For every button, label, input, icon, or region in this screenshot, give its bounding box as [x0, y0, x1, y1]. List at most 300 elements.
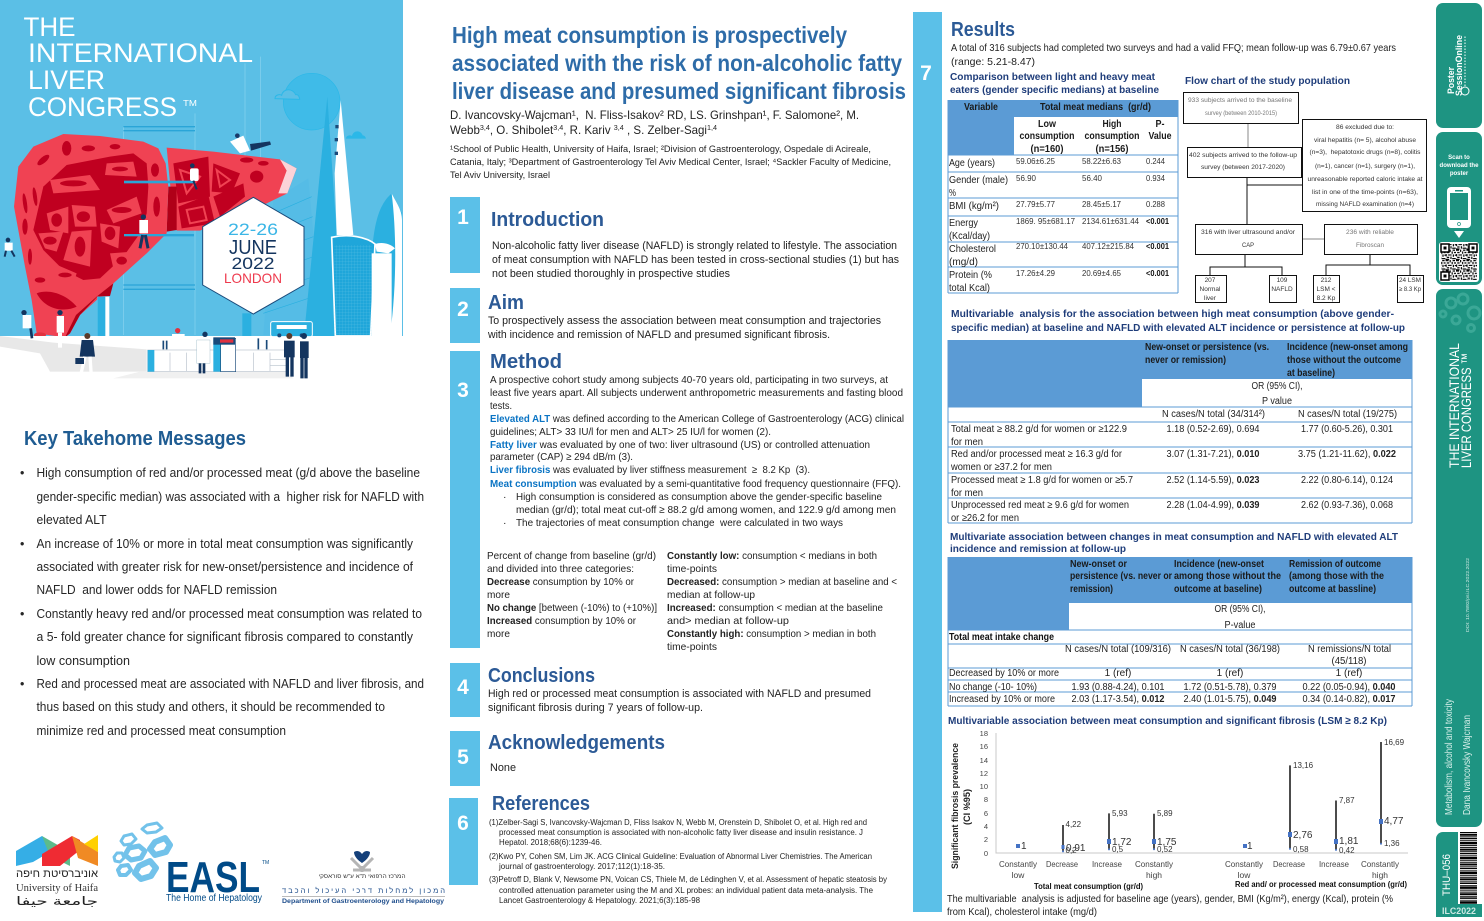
- sidebar: scan QR code: download the: [1440, 163, 1479, 169]
- table: multivariable analysis: 2.52 (1.14-5.59), 0.023: [1166, 475, 1260, 486]
- chart: meat consumption and significant fibrosis: 0,91: [1066, 843, 1086, 854]
- y axis ticks: 12: [980, 769, 988, 778]
- lab bench: [148, 350, 287, 372]
- logo: University of Haifa: [16, 835, 98, 908]
- data labels: 0,5: [1112, 845, 1124, 854]
- panel: introduction: 1: [457, 206, 469, 229]
- table values: 0.244: [1146, 157, 1165, 166]
- affiliations: Catania, Italy; ³Department of Gastroenterology Tel Aviv Medical Center, Israel; ⁴Sackler Faculty of Medicine,: [450, 157, 891, 168]
- row labels: Gender (male): [949, 175, 1008, 186]
- data labels: 16,69: [1384, 738, 1405, 747]
- heading: multivariable analysis table: specific median) at baseline and NAFLD with elevated ALT incidence or persistence at follow-up: [951, 322, 1405, 334]
- congress name: [24, 12, 253, 122]
- table: multivariable analysis: 2.22 (0.80-6.14), 0.124: [1301, 475, 1393, 486]
- y axis title: (CI %95): [962, 789, 973, 825]
- icon: QR code: [1439, 242, 1479, 282]
- panel: conclusions: significant fibrosis during 7 years of follow-up.: [488, 702, 703, 714]
- table: multivariable analysis: Processed meat ≥ 1.8 g/d for women or ≥5.7: [951, 475, 1133, 486]
- panel: method: [450, 351, 904, 653]
- panel: method: ·: [503, 517, 506, 529]
- table: changes in meat consumption: No change (-10- 10%): [949, 682, 1037, 693]
- takehome bullet list: •: [20, 607, 24, 621]
- sidebar: scan QR code: [1436, 132, 1482, 285]
- panel: introduction: of meat consumption with NAFLD has been tested in cross-sectional studies (1) but has: [492, 254, 900, 266]
- table: changes in meat consumption: New-onset or: [1070, 559, 1127, 570]
- authors: 3,4: [480, 123, 490, 132]
- chart: meat consumption and significant fibrosis: 2,76: [1293, 830, 1313, 841]
- method column: trajectory definitions: median at follow-up: [667, 589, 755, 601]
- table: multivariable analysis: New-onset or persistence (vs.: [1145, 342, 1269, 353]
- table: changes in meat consumption: OR (95% CI),: [1214, 604, 1266, 615]
- logo: EASL: The Home of Hepatology: [166, 893, 262, 904]
- method column: percent change categories: and divided into three categories:: [487, 563, 634, 575]
- flow chart of study population: viral hepatitis (n= 5), alcohol abuse: [1314, 137, 1416, 144]
- the shard: [304, 97, 337, 336]
- table: multivariable analysis: Unprocessed red meat ≥ 9.6 g/d for women: [951, 500, 1129, 511]
- panel: introduction: [450, 197, 900, 280]
- takehome bullet list: gender-specific median) was associated with a higher risk for NAFLD with: [36, 490, 424, 504]
- table: changes in meat consumption: N cases/N total (109/316): [1065, 644, 1171, 655]
- takehome bullet list: •: [20, 466, 24, 480]
- panel: references: Lancet Gastroenterology & Hepatology. 2021;6(3):185-98: [499, 896, 701, 905]
- panel: aim: with incidence and remission of NAFLD and presumed significant fibrosis.: [487, 329, 830, 341]
- table: changes in meat consumption: among those without the: [1174, 571, 1281, 582]
- table values: 59.06±6.25: [1016, 157, 1055, 166]
- panel: references: (3)Petroff D, Blank V, Newsome PN, Voican CS, Thiele M, de Lédinghen V, et al. Assessment of hepatic steatosis by: [489, 875, 887, 884]
- takehome bullet list: [20, 466, 424, 738]
- sun and clouds: [283, 73, 340, 130]
- y axis ticks: 8: [984, 795, 988, 804]
- shelves and columns: [124, 181, 194, 183]
- method column: percent change categories: Increased consumption by 10% or: [487, 615, 636, 627]
- affiliations: [450, 144, 891, 181]
- table: changes in meat consumption: Decreased by 10% or more: [949, 668, 1059, 679]
- table: multivariable analysis: those without the outcome: [1287, 355, 1401, 366]
- rubble: [10, 332, 101, 354]
- flow chart of study population: list in one of the time-points (n=63),: [1312, 189, 1418, 196]
- panel: method: Method: [490, 351, 562, 373]
- category labels: Constantly: [1135, 859, 1174, 869]
- congress date text: JUNE: [229, 237, 277, 259]
- group labels: Red and/ or processed meat consumption (gr/d): [1235, 880, 1407, 889]
- y axis ticks: 0: [984, 849, 988, 858]
- chart: meat consumption and significant fibrosis: 1,75: [1157, 837, 1177, 848]
- panel: conclusions: Conclusions: [488, 665, 595, 687]
- panel: acknowledgements: Acknowledgements: [488, 732, 665, 754]
- table: light vs heavy meat eaters: consumption: [1020, 131, 1075, 142]
- panel: method: High consumption is considered as consumption above the gender-specific baseline: [516, 491, 882, 503]
- authors: , S. Zelber-Sagi: [624, 123, 707, 137]
- title: associated with the risk of non-alcoholic fatty: [452, 50, 902, 76]
- sidebar: congress info: Dana Ivancovsky Wajcman: [1462, 715, 1473, 815]
- sidebar: congress info: [1436, 289, 1482, 827]
- panel: method: The trajectories of meat consumption change were calculated in two ways: [516, 517, 843, 529]
- logo: Gastroenterology department: Department of Gastroenterology and Hepatology: [282, 898, 444, 905]
- table: changes in meat consumption: Remission of outcome: [1289, 559, 1381, 570]
- heading: multivariate changes table: incidence and remission at follow-up: [950, 543, 1126, 555]
- method column: trajectory definitions: time-points: [667, 641, 717, 653]
- y axis ticks: 18: [980, 729, 988, 738]
- title: liver disease and presumed significant fibrosis: [452, 78, 906, 104]
- flow chart of study population: 8.2 Kp: [1317, 295, 1336, 302]
- logo: Gastroenterology department: המכון למחלות דרכי העיכול והכבד: [282, 886, 445, 895]
- takehome bullet list: associated with greater risk for new-onset/persistence and incidence of: [36, 560, 413, 574]
- heading: comparison table: [950, 71, 1159, 96]
- category labels: [999, 859, 1400, 880]
- y axis ticks: 2: [984, 835, 988, 844]
- flow chart of study population: 933 subjects arrived to the baseline: [1188, 97, 1292, 104]
- row labels: (mg/d): [949, 257, 978, 268]
- data labels: 0,58: [1293, 845, 1309, 854]
- table: multivariable analysis: for men: [951, 488, 983, 499]
- table values: 0.288: [1146, 200, 1165, 209]
- sidebar: congress info: LIVER CONGRESS ™: [1458, 353, 1474, 468]
- congress name: LIVER: [28, 65, 105, 95]
- panel: method: guidelines; ALT> 33 IU/l for men and ALT> 25 IU/l for women (2).: [490, 426, 771, 438]
- panel: references: 6: [457, 812, 469, 835]
- panel: method: Elevated ALT was defined according to the American College of Gastroenterology (ACG) clinical: [490, 413, 904, 425]
- data labels: 0,2: [1066, 846, 1077, 855]
- congress date text: 22-26: [228, 220, 278, 239]
- row labels: BMI (kg/m²): [949, 201, 999, 212]
- table: light vs heavy meat eaters: High: [1102, 119, 1122, 130]
- group labels: [1034, 880, 1407, 891]
- table: multivariable analysis: at baseline): [1287, 368, 1335, 379]
- panel: references: References: [492, 793, 590, 815]
- takehome bullet list: Red and processed meat are associated with NAFLD and liver fibrosis, and: [36, 677, 424, 691]
- flow chart of study population: 402 subjects arrived to the follow-up: [1189, 152, 1297, 159]
- authors: [450, 108, 859, 137]
- results side band: [913, 12, 942, 912]
- table: changes in meat consumption: outcome at bassline): [1289, 584, 1376, 595]
- panel: method: 3: [457, 379, 469, 402]
- panel: conclusions: High red or processed meat consumption is associated with NAFLD and presumed: [488, 688, 871, 700]
- row labels: Cholesterol: [949, 244, 996, 255]
- table: multivariable analysis: 3.75 (1.21-11.62), 0.022: [1298, 449, 1396, 460]
- table: changes in meat consumption: 2.40 (1.01-5.75), 0.049: [1184, 694, 1277, 705]
- takehome bullet list: minimize red and processed meat consumption: [36, 724, 286, 738]
- panel: method: least five years apart. All subjects underwent anthropometric measurements and fasting blood: [490, 387, 903, 399]
- logo: EASL: [114, 823, 269, 904]
- panel: method: median (gr/d); total meat cut-off ≥ 88.2 g/d among women, and 122.9 g/d among men: [516, 504, 896, 516]
- flow chart of study population: Fibroscan: [1356, 242, 1384, 249]
- table values: 56.90: [1016, 174, 1036, 183]
- panel: references: processed meat consumption is associated with non-alcoholic fatty liver disease and insulin resistance. J: [499, 828, 863, 837]
- panel: introduction: not been studied thoroughly in prospective studies: [492, 268, 731, 280]
- table values: 58.22±6.63: [1082, 157, 1121, 166]
- y axis ticks: 16: [980, 742, 988, 751]
- table: multivariable analysis: 1.18 (0.52-2.69), 0.694: [1166, 424, 1260, 435]
- heading: multivariable analysis table: [951, 308, 1405, 334]
- logo: University of Haifa: אוניברסיטת חיפה: [16, 868, 98, 880]
- logo: University of Haifa: جامعة حيفا: [16, 894, 98, 908]
- authors: 1,4: [707, 123, 717, 132]
- results intro: [951, 19, 1396, 68]
- table: changes in meat consumption: outcome at baseline): [1174, 584, 1262, 595]
- table values: 56.40: [1082, 174, 1102, 183]
- table values: 270.10±130.44: [1016, 242, 1068, 251]
- table: changes in meat consumption: remission): [1070, 584, 1113, 595]
- panel: method: tests.: [490, 400, 512, 412]
- authors: 3,4: [553, 123, 563, 132]
- table values: <0.001: [1146, 242, 1169, 251]
- panel: method: A prospective cohort study among subjects 40-70 years old, participating in two surveys, at: [490, 374, 888, 386]
- panel: conclusions: 4: [457, 676, 469, 699]
- authors: D. Ivancovsky-Wajcman¹, N. Fliss-Isakov² RD, LS. Grinshpan¹, F. Salomone², M.: [450, 108, 859, 122]
- table: changes in meat consumption: 1.72 (0.51-5.78), 0.379: [1184, 682, 1277, 693]
- category labels: Decrease: [1046, 859, 1078, 869]
- table: changes in meat consumption: (among those with the: [1289, 571, 1384, 582]
- panel: method: Liver fibrosis was evaluated by liver stiffness measurement ≥ 8.2 Kp (3).: [490, 464, 810, 476]
- flow chart of study population: CAP: [1242, 242, 1254, 249]
- results side band: 7: [920, 62, 932, 85]
- table: light vs heavy meat eaters: Variable: [964, 102, 998, 113]
- data labels: 4,22: [1066, 820, 1082, 829]
- y axis title: [950, 743, 973, 869]
- affiliations: Tel Aviv University, Israel: [450, 170, 550, 181]
- category labels: Constantly: [1225, 859, 1264, 869]
- heading: multivariate changes table: [950, 531, 1399, 555]
- table values: <0.001: [1146, 217, 1169, 226]
- flow chart of study population: 24 LSM: [1399, 277, 1421, 284]
- table values: 407.12±215.84: [1082, 242, 1134, 251]
- table values: 2134.61±631.44: [1082, 217, 1139, 226]
- method column: trajectory definitions: and> median at follow-up: [667, 615, 789, 627]
- takehome bullet list: •: [20, 677, 24, 691]
- congress date text: 2022: [232, 255, 274, 273]
- data labels: 0,42: [1339, 846, 1355, 855]
- table: changes in meat consumption: N remissions/N total: [1308, 644, 1391, 655]
- panel: introduction: Non-alcoholic fatty liver disease (NAFLD) is strongly related to lifestyle. The association: [492, 240, 897, 252]
- footnote: from Kcal), cholesterol intake (mg/d): [947, 906, 1097, 918]
- table: changes in meat consumption: 1 (ref): [1217, 668, 1243, 679]
- panel: congress banner illustration: [0, 0, 403, 400]
- panel: aim: Aim: [488, 292, 524, 314]
- table: light vs heavy meat eaters: P-: [1156, 119, 1164, 130]
- method column: trajectory definitions: [667, 550, 897, 653]
- panel: references: (1)Zelber-Sagi S, Ivancovsky-Wajcman D, Fliss Isakov N, Webb M, Orenstein D, Shibolet O, et al. High red and: [489, 818, 867, 827]
- takehome bullet list: •: [20, 537, 24, 551]
- method column: percent change categories: more: [487, 589, 510, 601]
- row labels: (Kcal/day): [949, 231, 990, 242]
- category labels: Increase: [1319, 859, 1349, 869]
- table: multivariable analysis: OR (95% CI),: [1252, 381, 1302, 392]
- table: multivariable analysis: N cases/N total (34/314²): [1162, 409, 1265, 420]
- footnote: The multivariable analysis is adjusted for baseline age (years), gender, BMI (Kg/m²), energy (Kcal), protein (%: [947, 893, 1393, 905]
- chart: meat consumption and significant fibrosis: [950, 729, 1408, 891]
- method column: percent change categories: more: [487, 628, 510, 640]
- logo: Gastroenterology department: [282, 851, 445, 905]
- sidebar: poster number and barcode: THU–056: [1441, 854, 1453, 896]
- table: multivariable analysis: or ≥26.2 for men: [951, 513, 1019, 524]
- panel: aim: 2: [457, 298, 469, 321]
- y axis ticks: 10: [980, 782, 988, 791]
- method column: trajectory definitions: Constantly low: consumption < medians in both: [667, 550, 877, 562]
- group labels: Total meat consumption (gr/d): [1034, 882, 1143, 891]
- ground: [0, 336, 402, 400]
- table: multivariable analysis: women or ≥37.2 for men: [950, 462, 1052, 473]
- flow chart of study population: 212: [1321, 277, 1332, 284]
- table: light vs heavy meat eaters: Low: [1038, 119, 1056, 130]
- congress name: CONGRESS: [28, 92, 177, 122]
- takehome bullet list: thus based on this study and others, it should be recommended to: [36, 700, 385, 714]
- walkie-talkie tower: [332, 236, 375, 336]
- panel: references: controlled attenuation parameter using the M and XL probes: an individual patient data meta-analysis. The: [499, 886, 874, 895]
- table: multivariable analysis: P value: [1262, 396, 1292, 407]
- sidebar: poster number and barcode: [1436, 832, 1482, 917]
- panel: introduction: Introduction: [491, 209, 604, 231]
- sidebar: poster session online: SessionOnline: [1454, 35, 1465, 96]
- flow chart of study population: NAFLD: [1271, 286, 1293, 293]
- heading: comparison table: eaters (gender specific medians) at baseline: [950, 84, 1159, 96]
- background glass tower: [263, 178, 313, 335]
- table: changes in meat consumption: 1 (ref): [1105, 668, 1131, 679]
- sidebar: poster session online: [1436, 3, 1482, 128]
- table values: 0.934: [1146, 174, 1165, 183]
- method column: percent change categories: Decrease consumption by 10% or: [487, 576, 634, 588]
- table: changes in meat consumption: Total meat intake change: [949, 632, 1054, 643]
- chart: meat consumption and significant fibrosis: 4,77: [1384, 816, 1404, 827]
- flow chart of study population: 236 with reliable: [1346, 229, 1394, 236]
- category labels: Constantly: [1361, 859, 1400, 869]
- category labels: Decrease: [1273, 859, 1305, 869]
- chart: meat consumption and significant fibrosis: 1: [1021, 841, 1027, 852]
- panel: method: ·: [503, 491, 506, 503]
- results intro: A total of 316 subjects had completed two surveys and had a valid FFQ; mean follow-up was 6.79±0.67 years: [951, 42, 1396, 54]
- panel: references: [449, 793, 887, 905]
- flow chart of study population: (n=1), cancer (n=1), surgery (n=1),: [1315, 163, 1415, 170]
- method column: trajectory definitions: Decreased: consumption > median at baseline and <: [667, 576, 897, 588]
- title: High meat consumption is prospectively: [452, 22, 847, 48]
- takehome bullet list: Constantly heavy red and/or processed meat consumption was related to: [36, 607, 422, 621]
- sidebar: scan QR code: poster: [1450, 171, 1469, 177]
- heading: multivariate changes table: Multivariate association between changes in meat consumption and NAFLD with elevated ALT: [950, 531, 1399, 543]
- category labels: low: [1012, 870, 1025, 880]
- logo: EASL: TM: [262, 860, 269, 866]
- chart: meat consumption and significant fibrosis: 1,72: [1112, 837, 1132, 848]
- logo: EASL: EASL: [166, 853, 260, 902]
- affiliations: ¹School of Public Health, University of Haifa, Israel; ²Division of Gastroenterology, Ospedale di Acireale,: [450, 144, 871, 155]
- panel: method: Fatty liver was evaluated by one of two: liver ultrasound (US) or controlled attenuation: [490, 439, 870, 451]
- table: multivariable analysis: never or remission): [1145, 355, 1226, 366]
- sidebar: congress info: THE INTERNATIONAL: [1446, 343, 1462, 468]
- heading: comparison table: Comparison between light and heavy meat: [950, 71, 1155, 83]
- table values: 1869. 95±681.17: [1016, 217, 1075, 226]
- table: multivariable analysis: for men: [951, 437, 983, 448]
- table values: 27.79±5.77: [1016, 200, 1055, 209]
- congress name: INTERNATIONAL: [28, 38, 253, 68]
- panel: references: (2)Kwo PY, Cohen SM, Lim JK. ACG Clinical Guideline: Evaluation of Abnormal Liver Chemistries. The American: [489, 852, 872, 861]
- table: changes in meat consumption: 0.22 (0.05-0.94), 0.040: [1302, 682, 1396, 693]
- table: changes in meat consumption: 0.34 (0.14-0.82), 0.017: [1302, 694, 1396, 705]
- flow chart of study population: liver: [1204, 295, 1217, 302]
- authors: 3,4: [614, 123, 624, 132]
- key takehome messages: [20, 428, 424, 738]
- flow chart of study population: [1184, 92, 1426, 302]
- y axis ticks: [980, 729, 988, 858]
- table: changes in meat consumption: (45/118): [1332, 656, 1366, 667]
- sidebar: poster session online: Poster: [1446, 67, 1457, 94]
- flow chart of study population: survey (between 2010-2015): [1205, 110, 1277, 117]
- table: changes in meat consumption: 2.03 (1.17-3.54), 0.012: [1072, 694, 1165, 705]
- row labels: %: [949, 188, 956, 199]
- table: changes in meat consumption: Increased by 10% or more: [949, 694, 1055, 705]
- thin scaffold lines: [123, 57, 260, 335]
- flow chart of study population: survey (between 2017-2020): [1201, 164, 1285, 171]
- illustration: liver, skyline and scientists: [0, 57, 402, 400]
- table: multivariable analysis: N cases/N total (19/275): [1298, 409, 1397, 420]
- flow chart of study population: missing NAFLD examination (n=4): [1316, 201, 1414, 208]
- data labels: 5,93: [1112, 809, 1128, 818]
- table: multivariable analysis: 2.28 (1.04-4.99), 0.039: [1166, 500, 1260, 511]
- table: light vs heavy meat eaters: [948, 100, 1178, 294]
- data labels: 7,87: [1339, 796, 1355, 805]
- table: changes in meat consumption: persistence (vs. never or: [1070, 571, 1172, 582]
- congress name: TM: [183, 99, 197, 108]
- table values: <0.001: [1146, 269, 1169, 278]
- table values: 28.45±5.17: [1082, 200, 1121, 209]
- logo: Gastroenterology department: המרכז הרפואי ת"א ע"ש סוראסקי: [318, 874, 406, 880]
- takehome bullet list: High consumption of red and/or processed meat (g/d above the baseline: [36, 466, 420, 480]
- table: multivariable analysis: 3.07 (1.31-7.21), 0.010: [1166, 449, 1260, 460]
- row labels: total Kcal): [949, 283, 990, 294]
- method column: trajectory definitions: Constantly high: consumption > median in both: [667, 628, 876, 640]
- liver right lobe: [167, 148, 297, 231]
- category labels: high: [1146, 870, 1162, 880]
- table: changes in meat consumption: N cases/N total (36/198): [1180, 644, 1280, 655]
- table: light vs heavy meat eaters: (n=160): [1030, 144, 1064, 155]
- category labels: Increase: [1092, 859, 1122, 869]
- sidebar: scan QR code: Scan to: [1448, 155, 1470, 161]
- footnote: [947, 893, 1393, 918]
- flow chart of study population: 86 excluded due to:: [1336, 124, 1394, 131]
- table: light vs heavy meat eaters: (n=156): [1096, 144, 1128, 155]
- takehome bullet list: An increase of 10% or more in total meat consumption was significantly: [36, 537, 414, 551]
- table values: [1016, 157, 1169, 278]
- heading: fibrosis chart: Multivariable association between meat consumption and significant fibrosis (LSM ≥ 8.2 Kp): [948, 715, 1387, 727]
- authors: , R. Kariv: [563, 123, 614, 137]
- panel: aim: To prospectively assess the association between meat consumption and trajectories: [488, 315, 882, 327]
- authors: Webb: [450, 123, 481, 137]
- bus: [271, 322, 312, 337]
- liver lobule segments: [38, 162, 142, 283]
- category labels: low: [1238, 870, 1251, 880]
- category labels: Constantly: [999, 859, 1038, 869]
- table: changes in meat consumption: 1 (ref): [1336, 668, 1362, 679]
- flow chart of study population: (n=3), hepatotoxic drugs (n=8), colitis: [1310, 149, 1421, 156]
- chart: meat consumption and significant fibrosis: 1: [1247, 841, 1253, 852]
- table: light vs heavy meat eaters: Value: [1148, 131, 1172, 142]
- table: multivariable analysis: [948, 340, 1412, 524]
- y axis ticks: 6: [984, 809, 988, 818]
- method column: trajectory definitions: Increased: consumption < median at the baseline: [667, 602, 883, 614]
- table: light vs heavy meat eaters: consumption: [1084, 131, 1140, 142]
- row labels: Age (years): [949, 158, 995, 169]
- row labels: Protein (%: [949, 270, 992, 281]
- flow chart of study population: Normal: [1200, 286, 1221, 293]
- sidebar: congress info: DOI: 10.7892/psi.ILC.2022.2022: [1465, 557, 1470, 632]
- heading: key takehome messages: Key Takehome Messages: [24, 428, 246, 450]
- results intro: Results: [951, 19, 1015, 41]
- data labels: 1,36: [1384, 839, 1400, 848]
- panel: references: Hepatol. 2018;68(6):1239-46.: [499, 838, 602, 847]
- congress date text: LONDON: [224, 270, 282, 286]
- sidebar: poster number and barcode: ILC2022: [1442, 906, 1476, 916]
- data labels: [1066, 738, 1405, 855]
- flow chart of study population: ≥ 8.3 Kp: [1399, 286, 1421, 293]
- table: light vs heavy meat eaters: Total meat medians (gr/d): [1040, 102, 1151, 113]
- table: multivariable analysis: Total meat ≥ 88.2 g/d for women or ≥122.9: [951, 424, 1127, 435]
